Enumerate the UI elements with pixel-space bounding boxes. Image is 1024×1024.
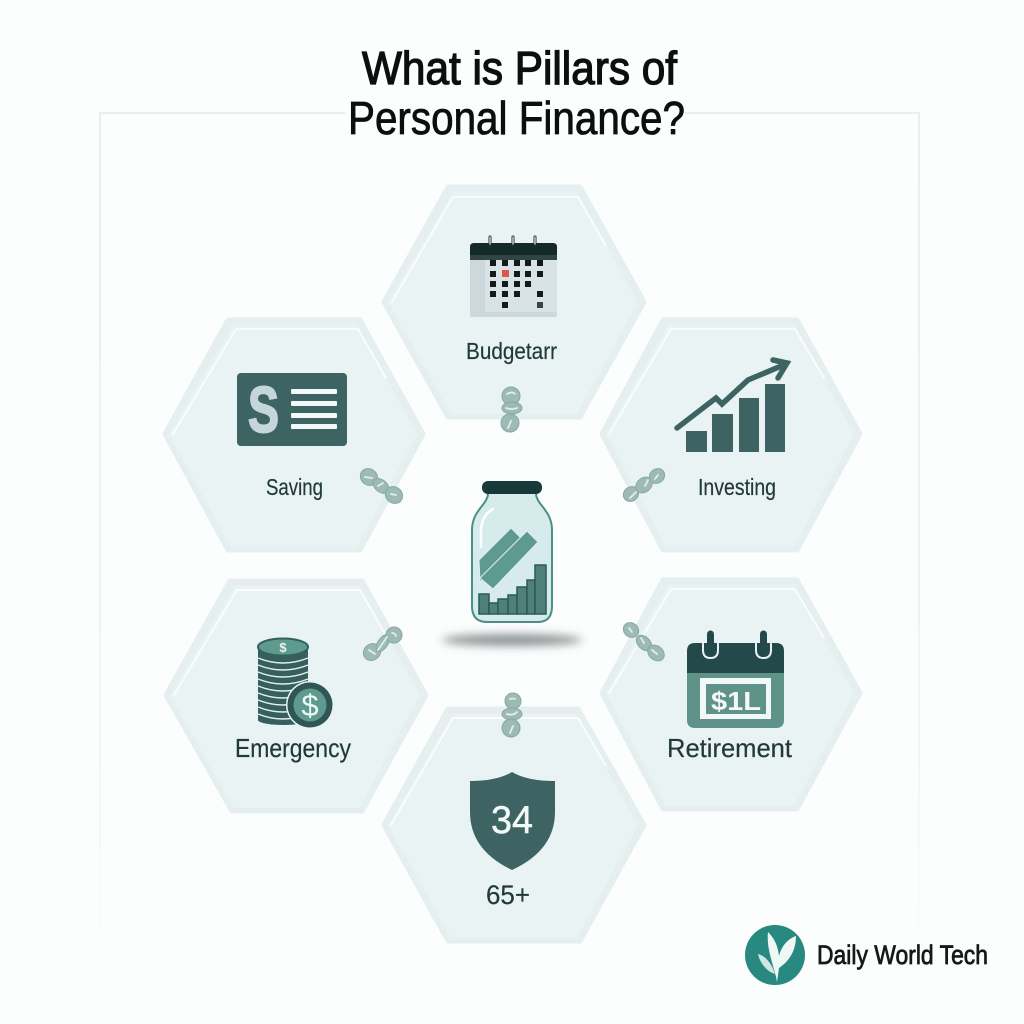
connector: investing	[620, 465, 668, 505]
icon: central jar	[442, 481, 582, 646]
title	[348, 42, 685, 144]
label: Budgetarr: Budgetarr	[466, 338, 557, 364]
connector: top	[501, 387, 522, 432]
logo mark	[745, 925, 805, 985]
label: Retirement: Retirement	[667, 733, 793, 763]
icon: wall calendar	[470, 237, 557, 317]
logo	[745, 925, 988, 985]
label: 65+: 65+	[486, 880, 530, 910]
label: Investing: Investing	[698, 474, 776, 500]
banknotes	[479, 528, 538, 589]
panel: retirement	[602, 580, 860, 809]
icon: retirement calendar	[687, 631, 784, 728]
icon: coin stack: $	[279, 640, 287, 655]
label: Saving: Saving	[266, 474, 323, 500]
icon: shield	[470, 772, 555, 870]
logo text: Daily World Tech	[817, 940, 988, 970]
label: Emergency: Emergency	[235, 733, 351, 763]
icon: savings card: S	[248, 373, 279, 446]
panel: investing	[602, 320, 860, 550]
title: What is Pillars of	[362, 42, 677, 94]
icon: savings card	[237, 373, 347, 446]
panel: saving	[165, 320, 423, 550]
connector: retirement	[620, 619, 667, 664]
icon: shield: 34	[491, 799, 533, 842]
icon: retirement calendar: $1L	[711, 686, 761, 716]
connector: saving	[357, 465, 406, 507]
jar bars	[479, 565, 546, 614]
panel: emergency	[166, 581, 426, 811]
icon: growth chart	[677, 360, 787, 452]
jar lid	[482, 481, 542, 494]
icon: coin stack: $	[301, 688, 319, 723]
panel: 65+	[384, 709, 644, 941]
icon: coin stack	[258, 638, 334, 729]
title: Personal Finance?	[348, 92, 685, 144]
connector: bottom	[502, 693, 522, 737]
connector: emergency	[360, 624, 405, 664]
panel: budgeting	[384, 187, 644, 417]
